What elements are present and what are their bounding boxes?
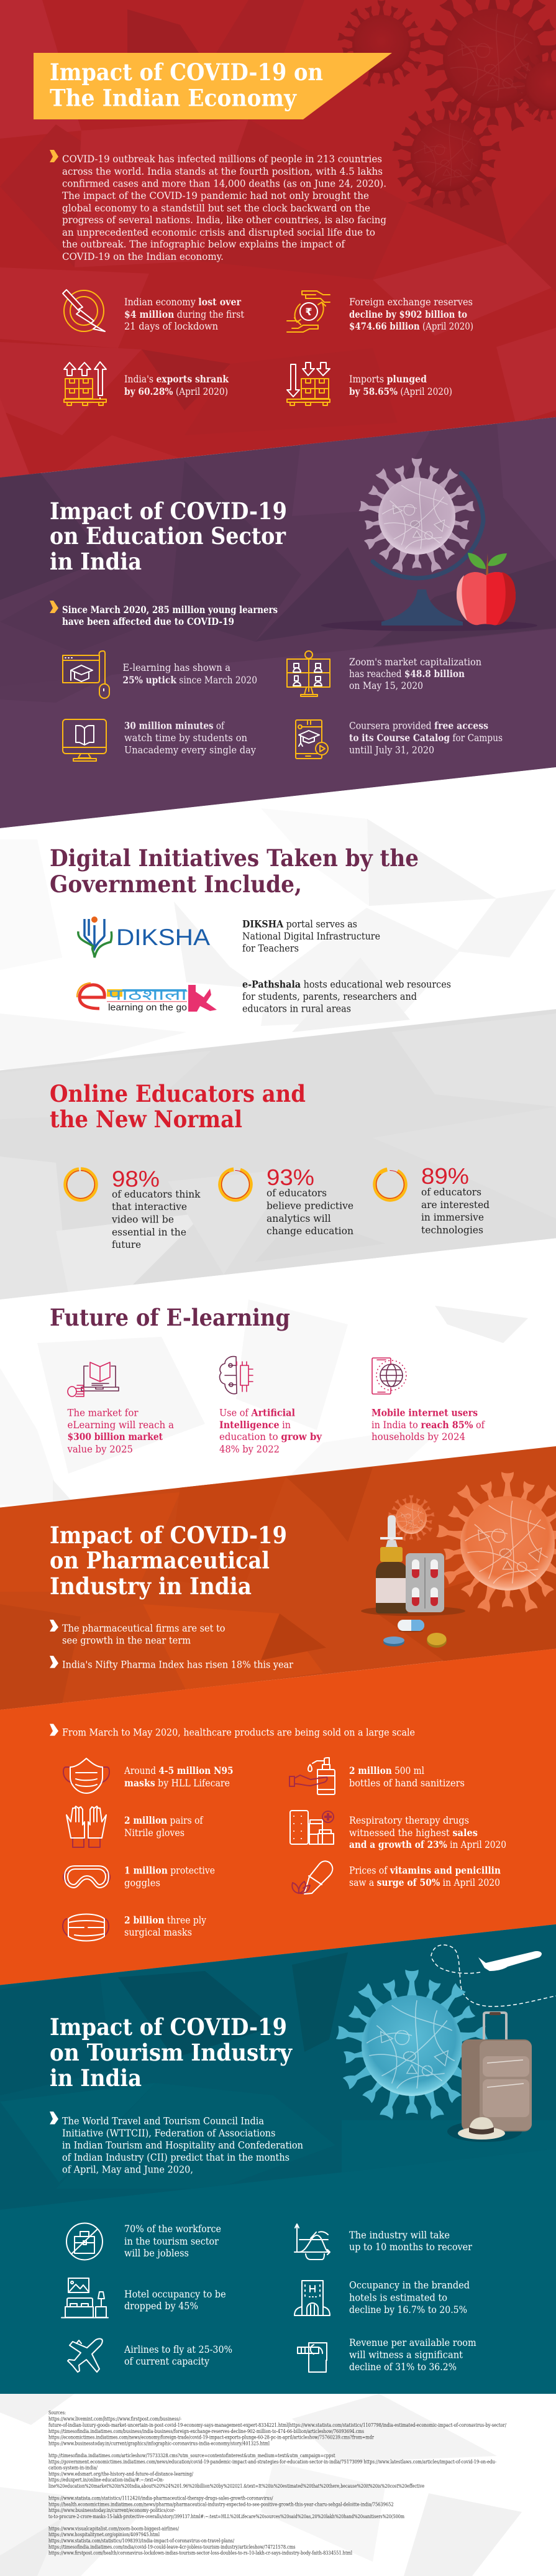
- bullet paragraph: tourism predictions: Initiative (WTTCII), Federation of Associations: [62, 2128, 276, 2139]
- text: sources list: https://www.statista.com/statistics/1112420/india-pharmaceutical-therapy-drugs-sales-growth-coronavirus/: [48, 2496, 273, 2501]
- title banner: Impact of COVID-19 on The Indian Economy: [34, 53, 392, 119]
- stat: N95 masks: Around 4-5 million N95: [124, 1765, 234, 1776]
- intro paragraph with bullet: progress of several nations. India, like other countries, is also facing: [62, 215, 386, 226]
- text: 89% of educators: of educators: [421, 1187, 481, 1198]
- intro paragraph with bullet: the outbreak. The infographic below explains the impact of: [62, 239, 345, 250]
- stat: hotel occupancy: Hotel occupancy to be: [124, 2289, 226, 2300]
- text: sources list: Sources:: [48, 2410, 66, 2416]
- heading: tourism: in India: [50, 2064, 142, 2092]
- stat: economy lost over $4 million: [124, 296, 245, 332]
- text: 89% of educators: technologies: [421, 1225, 483, 1236]
- stat: nitrile gloves: Nitrile gloves: [124, 1827, 185, 1839]
- heading: tourism: Impact of COVID-19: [50, 2013, 287, 2041]
- text: DIKSHA description: for Teachers: [242, 943, 299, 954]
- text: e-Pathshala description: educators in rural areas: [242, 1004, 351, 1015]
- intro paragraph with bullet: COVID-19 outbreak has infected millions of people in 213 countries: [62, 154, 382, 165]
- illustration: orange virus, bottle, blister and pills: [361, 1472, 556, 1648]
- intro paragraph with bullet: across the world. India stands at the fourth position, with 4.5 lakhs: [62, 166, 383, 177]
- text: 93% of educators: believe predictive: [267, 1200, 353, 1211]
- text: mobile internet users: Mobile internet users: [371, 1406, 478, 1419]
- stat: foreign exchange reserves: [349, 297, 473, 332]
- stat: 10 months to recover: up to 10 months to recover: [349, 2241, 473, 2253]
- stat: vitamins and penicillin: saw a surge of 50% in April 2020: [349, 1877, 500, 1888]
- stat: jobless workforce: in the tourism sector: [124, 2236, 219, 2247]
- text: market for elearning: value by 2025: [67, 1444, 133, 1455]
- icon: economy lost, lightning arrow: [63, 290, 105, 331]
- text: sources list: https://www.edsmart.org/the-history-and-future-of-distance-learning/: [48, 2471, 193, 2477]
- icon: gloves: [66, 1806, 106, 1847]
- stat: N95 masks: [124, 1765, 234, 1789]
- panel: pharmaceutical section background: [0, 1443, 556, 1716]
- heading: pharmaceutical: on Pharmaceutical: [50, 1547, 270, 1574]
- logo: DIKSHA: [78, 916, 210, 958]
- stat: nitrile gloves: 2 million pairs of: [124, 1814, 204, 1826]
- heading: online educators: [50, 1080, 306, 1133]
- panel: pharmaceutical stats background: [0, 1649, 556, 1985]
- panel: online educators background: [0, 1007, 556, 1306]
- stat: imports plunged: Imports plunged: [349, 373, 427, 385]
- heading: tourism: [50, 2013, 293, 2092]
- text: 98% of educators: [111, 1166, 201, 1250]
- text: 89% of educators: in immersive: [421, 1212, 484, 1223]
- text: sources list: https://www.visualcapitalist.com/zoom-boom-biggest-airlines/: [48, 2526, 179, 2532]
- icon: no briefcase: [66, 2223, 103, 2260]
- text: mobile internet users: households by 2024: [371, 1431, 465, 1443]
- icon: book on monitor: [63, 719, 106, 761]
- panel: economy section background: [0, 0, 556, 491]
- bullet paragraph: tourism predictions: [50, 2112, 303, 2176]
- stat: surgical masks: [124, 1914, 206, 1938]
- heading: digital initiatives: Government Include,: [50, 870, 302, 898]
- panel: sources background: [0, 2394, 556, 2576]
- stat: coursera free access: [349, 720, 503, 756]
- stat: respiratory therapy drugs: and a growth of 23% in April 2020: [349, 1839, 506, 1850]
- stat: airlines capacity: of current capacity: [124, 2356, 209, 2367]
- stat: foreign exchange reserves: $474.66 billion (April 2020): [349, 320, 473, 332]
- icon: AI brain chip: [220, 1357, 253, 1394]
- stat: N95 masks: masks by HLL Lifecare: [124, 1777, 230, 1789]
- text: mobile internet users: in India to reach 85% of: [371, 1419, 485, 1431]
- text: sources list: https://timesofindia.indiatimes.com/india/covid-19-could-leave-4cr-jobless-tourism-industry/articleshow/74721578.cms: [48, 2544, 296, 2550]
- stat: 98% donut: [65, 1169, 96, 1200]
- text: sources list: https://www.statista.com/statistics/1098393/india-impact-of-coronavirus-on-travel-plans/: [48, 2538, 234, 2544]
- text: 93% of educators: 93%: [267, 1165, 314, 1190]
- stat: jobless workforce: 70% of the workforce: [124, 2223, 221, 2235]
- heading: tourism: on Tourism Industry: [50, 2039, 293, 2066]
- text: sources list: http://timesofindia.indiatimes.com/articleshow/75733328.cms?utm_source=contentofinterest&utm_medium=text&utm_campaign=cppst: [48, 2453, 335, 2458]
- text: DIKSHA description: [242, 918, 380, 954]
- stat: protective goggles: 1 million protective: [124, 1865, 215, 1877]
- stat: economy lost over $4 million: 21 days of lockdown: [124, 321, 218, 332]
- heading: online educators: the New Normal: [50, 1106, 242, 1133]
- heading: pharmaceutical: [50, 1521, 287, 1600]
- stat: exports shrank: [124, 373, 229, 397]
- stat: revenue per room: [349, 2337, 476, 2373]
- intro paragraph with bullet: confirmed cases and more than 14,000 deaths (as on June 24, 2020).: [62, 178, 386, 189]
- heading: education: [50, 497, 287, 575]
- panel: education section background: [0, 410, 556, 833]
- stat: unacademy minutes: watch time by students on: [124, 732, 247, 744]
- intro paragraph with bullet: COVID-19 on the Indian economy.: [62, 251, 224, 262]
- heading: pharmaceutical: Industry in India: [50, 1572, 252, 1600]
- text: market for elearning: [67, 1408, 174, 1455]
- icon: zoom video call grid: [287, 651, 330, 696]
- bullets: pharma growth: see growth in the near term: [62, 1635, 191, 1646]
- panel: future of e-learning background: [1, 1257, 528, 1502]
- panel: digital initiatives background: [0, 767, 556, 1032]
- stat: unacademy minutes: [124, 720, 256, 756]
- icon: room keycard: [298, 2343, 327, 2372]
- stat: surgical masks: surgical masks: [124, 1927, 192, 1938]
- heading: education: in India: [50, 548, 142, 575]
- stat: coursera free access: Coursera provided free access: [349, 720, 488, 731]
- icon: airplane: [68, 2338, 103, 2372]
- stat: zoom capitalization: has reached $48.8 billion: [349, 668, 465, 680]
- text: sources list: cation-system-in-india/: [48, 2465, 98, 2471]
- stat: imports plunged: [349, 373, 452, 397]
- text: 89% of educators: are interested: [421, 1199, 490, 1211]
- stat: hand sanitizers: bottles of hand sanitizers: [349, 1778, 465, 1789]
- stat: zoom capitalization: [349, 657, 481, 691]
- text: e-Pathshala description: for students, parents, researchers and: [242, 991, 417, 1002]
- stat: hand sanitizers: [349, 1765, 465, 1789]
- text: sources list: https://www.businesstoday.in/current/economy-politics/cor-: [48, 2508, 176, 2513]
- bullet paragraph: tourism predictions: The World Travel and Tourism Council India: [62, 2115, 264, 2126]
- text: sources list: https://www.firstpost.com/health/coronavirus-lockdown-indias-tourism-sector-loss-doubles-to-rs-10-lakh-cr-says-industry-body-faith-8334551.html: [48, 2551, 352, 2556]
- logo: e-Pathshala: [77, 983, 217, 1013]
- text: artificial intelligence: 48% by 2022: [219, 1444, 280, 1455]
- text: sources list: [48, 2410, 506, 2556]
- bullet text: 285 million learners: [50, 601, 278, 627]
- heading: digital initiatives: Digital Initiatives Taken by the: [50, 844, 419, 872]
- text: sources list: https://www.livemint.com|https://www.firstpost.com/business/-: [48, 2416, 181, 2422]
- stat: zoom capitalization: on May 15, 2020: [349, 680, 423, 691]
- heading: pharmaceutical: Impact of COVID-19: [50, 1521, 287, 1549]
- text: sources list: https://eduxpert.in/online-education-india/#:~:text=On-: [48, 2477, 164, 2483]
- intro paragraph with bullet: global economy to a standstill but set the clock backward on the: [62, 203, 370, 214]
- title banner: Impact of COVID-19 on The Indian Economy: Impact of COVID-19 on: [50, 58, 323, 86]
- stat: revenue per room: will witness a significant: [349, 2350, 463, 2361]
- text: sources list: https://timesofindia.indiatimes.com/business/india-business/foreign-exchange-reserves-decline-902-million-to-474-66-billion/articleshow/76093694.cms: [48, 2429, 364, 2434]
- stat: nitrile gloves: [124, 1814, 204, 1839]
- text: mobile internet users: [371, 1406, 485, 1443]
- stat: respiratory therapy drugs: [349, 1815, 506, 1850]
- stat: airlines capacity: Airlines to fly at 25-30%: [124, 2344, 232, 2355]
- stat: foreign exchange reserves: Foreign exchange reserves: [349, 297, 473, 308]
- stat: imports plunged: by 58.65% (April 2020): [349, 385, 452, 397]
- stat: protective goggles: goggles: [124, 1878, 160, 1889]
- heading: online educators: Online Educators and: [50, 1080, 306, 1107]
- icon: e-learning browser with mortarboard and mouse: [63, 651, 109, 698]
- intro paragraph with bullet: [50, 150, 386, 262]
- icon: capsule with leaf: [292, 1861, 332, 1894]
- stat: branded hotel occupancy: decline by 16.7% to 20.5%: [349, 2304, 467, 2315]
- text: e-Pathshala description: e-Pathshala hosts educational web resources: [242, 979, 451, 990]
- icon: recovery chart: [294, 2224, 330, 2260]
- illustration: virus globe on stand with apple: [321, 458, 537, 631]
- panel: tourism section background: [0, 1924, 556, 2394]
- bullet paragraph: tourism predictions: of April, May and June 2020,: [62, 2164, 193, 2176]
- stat: exports shrank: India's exports shrank: [124, 373, 229, 385]
- bullet: healthcare products: From March to May 2020, healthcare products are being sold on a large scale: [62, 1727, 415, 1738]
- icon: laptop with book and coins: [68, 1362, 119, 1396]
- text: 98% of educators: future: [112, 1239, 141, 1250]
- stat: unacademy minutes: 30 million minutes of: [124, 720, 225, 731]
- stat: branded hotel occupancy: Occupancy in the branded: [349, 2280, 470, 2291]
- bullet paragraph: tourism predictions: of Indian Industry (CII) predict that in the months: [62, 2152, 289, 2163]
- icon: rupee exchange: [287, 291, 330, 332]
- bullet paragraph: tourism predictions: in Indian Tourism and Hospitality and Confederation: [62, 2140, 303, 2151]
- stat: hand sanitizers: 2 million 500 ml: [349, 1765, 424, 1776]
- text: sources list: https://health.economictimes.indiatimes.com/news/pharma/pharmaceutical-industry-expected-to-see-positive-growth-this-year-charu-sehgal-deloitte-india/75639652: [48, 2502, 394, 2507]
- text: 89% of educators: [421, 1163, 490, 1236]
- text: 93% of educators: change education: [267, 1226, 353, 1237]
- bullets: pharma growth: [50, 1620, 294, 1671]
- bullets: pharma growth: India's Nifty Pharma Index has risen 18% this year: [62, 1660, 294, 1671]
- stat: branded hotel occupancy: [349, 2280, 470, 2315]
- stat: e-learning uptick: 25% uptick since March 2020: [123, 674, 257, 686]
- text: e-Pathshala description: [242, 979, 451, 1015]
- stat: respiratory therapy drugs: Respiratory therapy drugs: [349, 1815, 469, 1826]
- stat: e-learning uptick: [123, 662, 257, 686]
- text: DIKSHA description: DIKSHA portal serves as: [242, 918, 357, 930]
- icon: goggles: [63, 1866, 110, 1888]
- icon: surgical mask: [63, 1914, 109, 1941]
- text: sources list: https://www.hospitalitynet.org/opinion/4097945.html: [48, 2532, 160, 2537]
- stat: airlines capacity: [124, 2344, 232, 2367]
- stat: 93% donut: [216, 1165, 255, 1204]
- text: artificial intelligence: Use of Artificial: [219, 1406, 295, 1419]
- icon: hotel building: [294, 2281, 330, 2315]
- stat: revenue per room: decline of 31% to 36.2%: [349, 2361, 457, 2373]
- stat: foreign exchange reserves: decline by $902 billion to: [349, 308, 467, 320]
- icon: imports boxes with down arrows: [287, 362, 330, 405]
- logo: DIKSHA: DIKSHA: [116, 925, 210, 950]
- text: 89% of educators: 89%: [421, 1163, 469, 1189]
- logo: e-Pathshala: पाठशाला: [108, 984, 188, 1005]
- bullet text: 285 million learners: have been affected due to COVID-19: [62, 616, 234, 627]
- heading: future of e-learning: Future of E-learning: [50, 1304, 290, 1331]
- icon: phone with mortarboard and play: [296, 720, 328, 759]
- stat: economy lost over $4 million: $4 million during the first: [124, 308, 245, 320]
- stat: revenue per room: Revenue per available room: [349, 2337, 476, 2348]
- stat: branded hotel occupancy: hotels is estimated to: [349, 2292, 447, 2303]
- text: sources list: line%20education%20market%20in%20India,about%20%24%201.96%20billion%20by%202021.&text=It%20is%20estimated%20that%20there,because%20it%20is%20cost%20effective: [48, 2483, 424, 2489]
- bullet text: 285 million learners: Since March 2020, 285 million young learners: [62, 604, 278, 616]
- stat: vitamins and penicillin: Prices of vitamins and penicillin: [349, 1865, 501, 1877]
- stat: zoom capitalization: Zoom's market capitalization: [349, 657, 481, 668]
- stat: exports shrank: by 60.28% (April 2020): [124, 385, 228, 397]
- illustration: dark red virus cluster: [337, 0, 556, 208]
- stat: 89% donut: [370, 1164, 411, 1205]
- illustration: teal virus, plane, suitcase and hat: [336, 1945, 556, 2142]
- stat: surgical masks: 2 billion three ply: [124, 1914, 206, 1926]
- heading: education: Impact of COVID-19: [50, 497, 287, 525]
- heading: digital initiatives: [50, 844, 419, 898]
- title banner: Impact of COVID-19 on The Indian Economy: The Indian Economy: [50, 85, 297, 112]
- icon: respiratory drugs: [290, 1811, 334, 1844]
- text: market for elearning: eLearning will reach a: [67, 1420, 174, 1431]
- stat: coursera free access: to its Course Catalog for Campus: [349, 732, 503, 744]
- text: market for elearning: $300 billion market: [67, 1431, 163, 1443]
- stat: jobless workforce: [124, 2223, 221, 2259]
- text: DIKSHA description: National Digital Infrastructure: [242, 931, 380, 942]
- icon: rupee exchange: ₹: [305, 306, 312, 318]
- stat: e-learning uptick: E-learning has shown a: [123, 662, 230, 673]
- stat: 10 months to recover: The industry will take: [349, 2230, 450, 2241]
- icon: hotel room with bed and picture: [62, 2278, 108, 2318]
- text: artificial intelligence: Intelligence in: [219, 1419, 291, 1431]
- intro paragraph with bullet: The impact of the COVID-19 pandemic had not only brought the: [62, 190, 369, 201]
- stat: hotel occupancy: [124, 2289, 226, 2312]
- bullets: pharma growth: The pharmaceutical firms are set to: [62, 1623, 225, 1634]
- text: market for elearning: The market for: [67, 1408, 139, 1419]
- icon: exports boxes with up arrows: [64, 362, 106, 405]
- heading: education: on Education Sector: [50, 522, 286, 550]
- text: 98% of educators: essential in the: [112, 1227, 186, 1238]
- text: 98% of educators: that interactive: [112, 1201, 187, 1212]
- text: 98% of educators: video will be: [111, 1214, 174, 1226]
- stat: unacademy minutes: Unacademy every single day: [124, 745, 256, 756]
- logo: e-Pathshala: learning on the go: [108, 1002, 187, 1013]
- icon: hand sanitizer: [289, 1758, 335, 1794]
- stat: protective goggles: [124, 1865, 215, 1889]
- text: sources list: https://economictimes.indiatimes.com/news/economy/foreign-trade/covid-19-impact-exports-plunge-60-28-pc-in-april/articleshow/75760239.cms?from=mdr: [48, 2435, 374, 2440]
- text: 98% of educators: of educators think: [112, 1189, 201, 1200]
- stat: vitamins and penicillin: [349, 1865, 501, 1888]
- stat: jobless workforce: will be jobless: [124, 2248, 189, 2259]
- text: sources list: https://www.businesstoday.in/current/graphics/infographic-coronavirus-india-economy/story/401325.html: [48, 2441, 270, 2447]
- text: 93% of educators: analytics will: [267, 1213, 331, 1224]
- icon: phone with globe: [372, 1358, 406, 1394]
- text: sources list: to-to-procure-2-crore-masks-15-lakh-protective-overalls/story/399137.html#:~:text=HLL%20Lifecare%20sources%20said%20as,20%20lakh%20hand%20sanitisers%20(500m: [48, 2514, 404, 2519]
- intro paragraph with bullet: an unprecedented economic crisis and disrupted social life due to: [62, 227, 375, 238]
- stat: coursera free access: untill July 31, 2020: [349, 745, 434, 756]
- stat: respiratory therapy drugs: witnessed the highest sales: [349, 1827, 478, 1839]
- text: 93% of educators: of educators: [267, 1188, 327, 1199]
- stat: 10 months to recover: [349, 2230, 473, 2253]
- stat: economy lost over $4 million: Indian economy lost over: [124, 296, 242, 308]
- stat: hotel occupancy: dropped by 45%: [124, 2301, 198, 2312]
- text: artificial intelligence: [219, 1406, 322, 1455]
- text: artificial intelligence: education to grow by: [219, 1431, 322, 1443]
- icon: N95 mask: [63, 1758, 109, 1793]
- text: 93% of educators: [267, 1165, 353, 1237]
- text: 98% of educators: 98%: [112, 1166, 160, 1191]
